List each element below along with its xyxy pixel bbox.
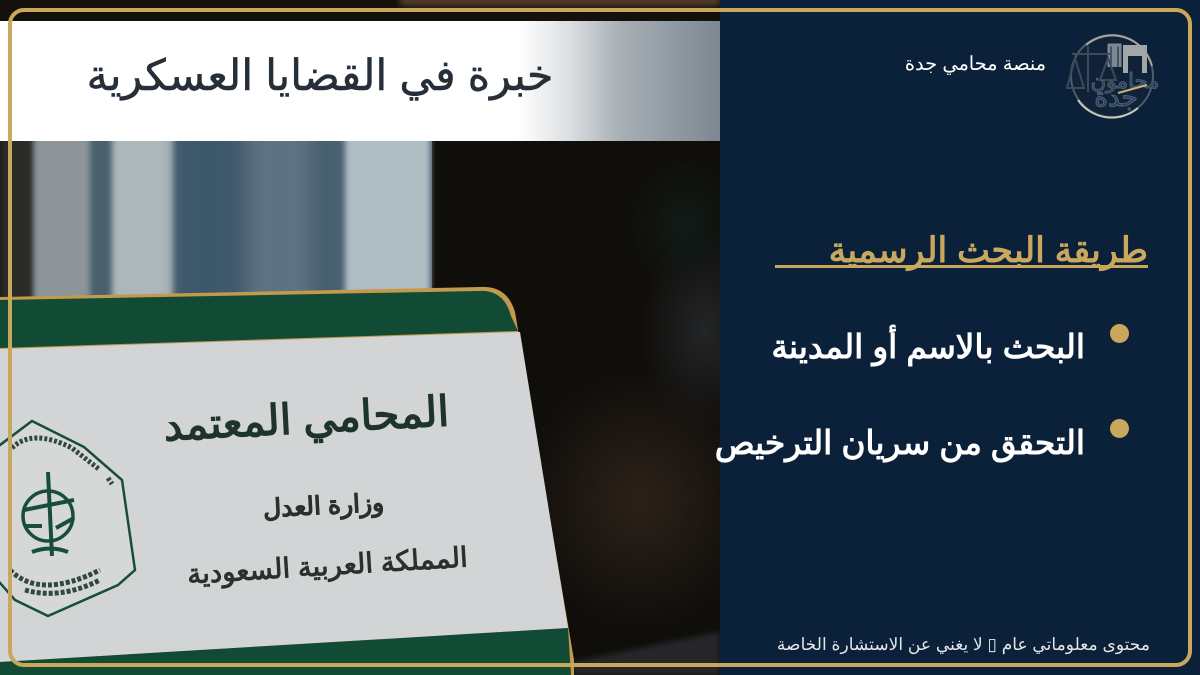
top white banner (0, 21, 720, 141)
bullet list (715, 324, 1129, 463)
blurred window background (0, 141, 434, 297)
bullet dot 2 (1110, 419, 1129, 438)
banner text: خبرة في القضايا العسكرية (87, 52, 553, 101)
footer disclaimer: محتوى معلوماتي عام ▯ لا يغني عن الاستشارة الخاصة (777, 635, 1150, 654)
nameplate (0, 287, 574, 675)
nameplate title: المحامي المعتمد (162, 388, 450, 451)
icon: circular logo: محامون (1091, 70, 1159, 94)
seal emblem (0, 421, 135, 616)
bullet text 2: التحقق من سريان الترخيص (715, 424, 1085, 461)
bullet dot 1 (1110, 324, 1129, 343)
icon: circular logo: جدة (1094, 82, 1138, 112)
heading underline (775, 265, 1148, 268)
ministry text: وزارة العدل (262, 489, 385, 524)
panel: navy content panel (720, 0, 1200, 675)
heading: طريقة البحث الرسمية (829, 231, 1148, 270)
panel: photo of lawyer nameplate (0, 0, 720, 675)
icon: circular logo (1066, 34, 1159, 119)
bullet text 1: البحث بالاسم أو المدينة (771, 328, 1085, 365)
kingdom text: المملكة العربية السعودية (186, 541, 469, 592)
brand text: منصة محامي جدة (905, 54, 1046, 75)
